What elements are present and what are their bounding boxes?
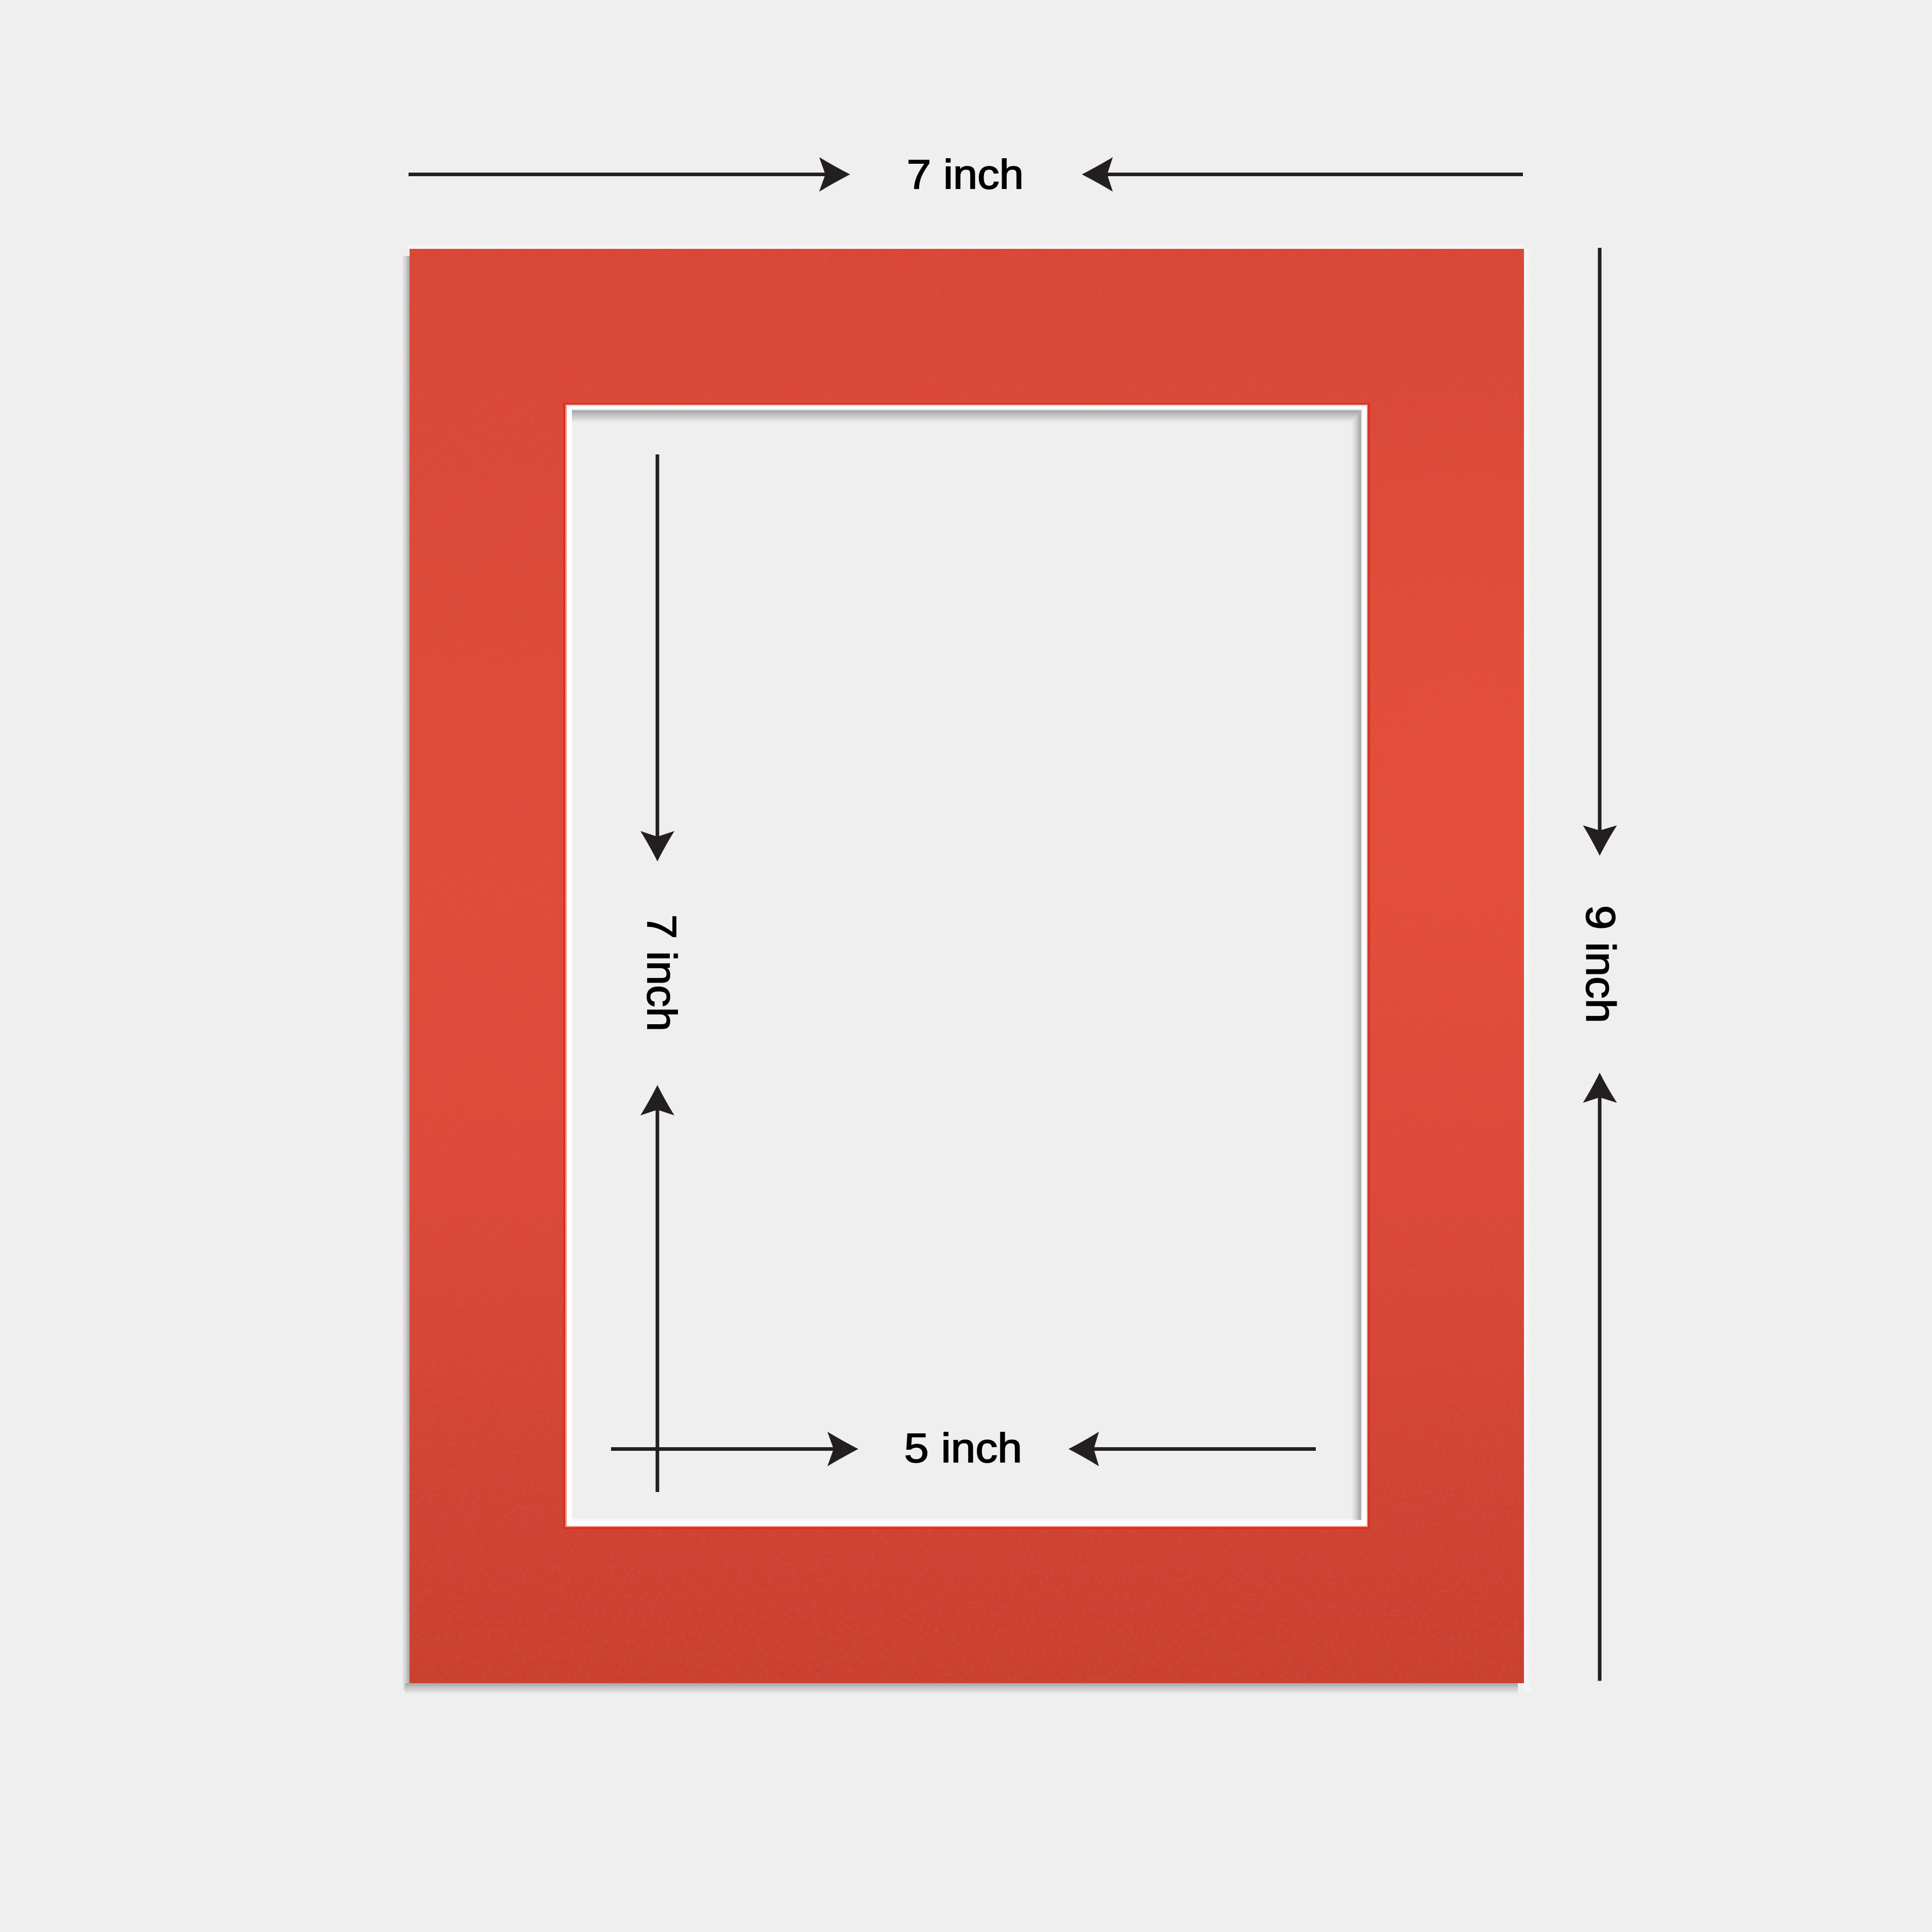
arrow: top width left [409,157,850,192]
arrow: inner height top [640,454,674,861]
arrow: top width right [1082,157,1523,192]
arrow: inner height bottom [640,1085,674,1492]
inner top shadow [572,410,1362,422]
window bevel and opening [563,403,1370,1529]
panel: red photo mat [402,244,1533,1694]
label: outer height 9 inch: 9 inch [1578,905,1624,1023]
arrow: outer height bottom [1583,1073,1617,1681]
label: inner width 5 inch: 5 inch [904,1425,1022,1471]
label: outer width 7 inch: 7 inch [907,151,1024,197]
arrow: inner width right [1069,1432,1316,1466]
label: inner height 7 inch: 7 inch [639,914,685,1031]
arrow: inner width left [611,1432,858,1466]
mat board surface [410,249,1524,1683]
arrow: outer height top [1583,248,1617,856]
inner right shadow [1351,410,1362,1520]
mat drop shadow and edge highlights [402,244,1533,1694]
